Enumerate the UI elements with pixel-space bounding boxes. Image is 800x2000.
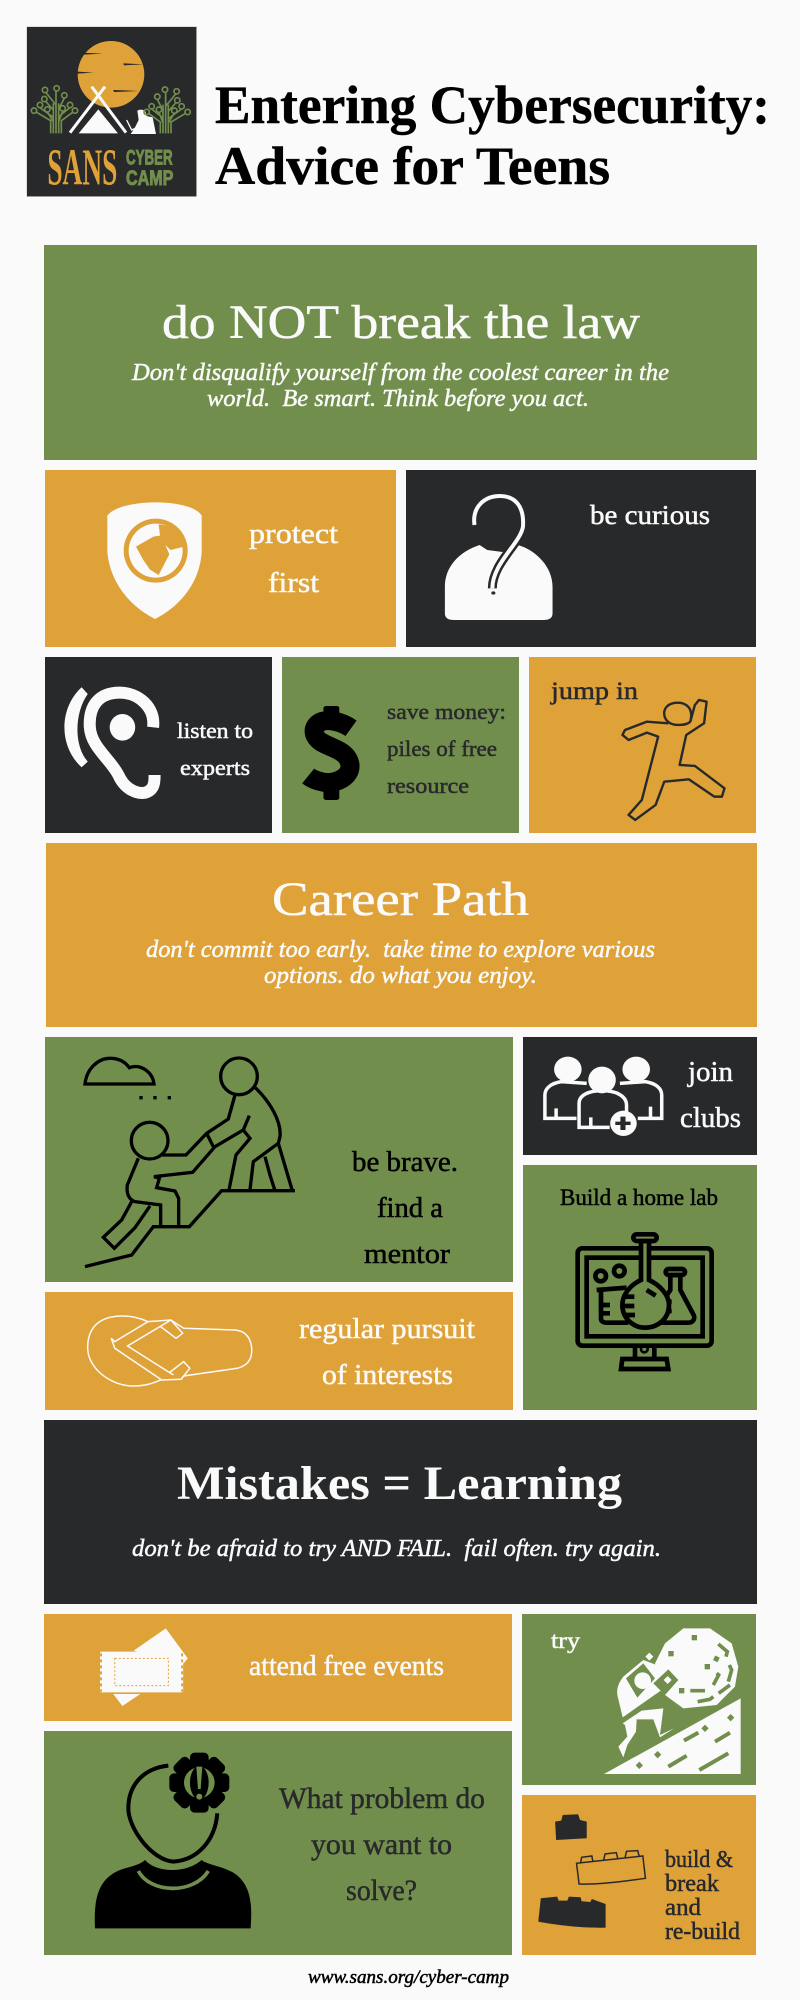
text: don't be afraid: don't be afraid to try AND FAIL. fail often. try again. bbox=[132, 1536, 661, 1562]
label: protect first bbox=[249, 518, 338, 599]
icon: ear bbox=[64, 687, 155, 793]
text: don't commit too early: don't commit too early. take time to explore various bbox=[146, 937, 655, 963]
label: join clubs bbox=[680, 1057, 741, 1134]
icon: circuit tree right bbox=[144, 87, 190, 133]
panel: protect first bbox=[45, 470, 396, 647]
icon: building bricks bbox=[538, 1814, 645, 1928]
label: listen to experts: experts bbox=[180, 755, 250, 780]
label: save money: resource bbox=[387, 773, 469, 798]
icon: dollar sign bbox=[308, 706, 351, 800]
label: protect first: protect bbox=[249, 518, 338, 550]
label: build a home lab: Build a home lab bbox=[560, 1185, 718, 1210]
icon: mentor helping climber bbox=[85, 1058, 295, 1267]
panel: try bbox=[522, 1614, 756, 1785]
label: try: try bbox=[551, 1628, 581, 1653]
icon: group of people bbox=[545, 1057, 662, 1136]
label: regular pursuit of interests bbox=[299, 1314, 475, 1391]
panel: be curious bbox=[406, 470, 756, 647]
label: build and re-build: break bbox=[665, 1871, 719, 1897]
panel: career path bbox=[46, 843, 757, 1027]
label: save money bbox=[387, 699, 506, 798]
heading: mistakes = learning: Mistakes = Learning bbox=[177, 1457, 622, 1510]
label: be brave, find a mentor: find a bbox=[377, 1193, 444, 1224]
logo: SANS Cyber Camp bbox=[27, 27, 197, 197]
text: don't commit too early bbox=[146, 937, 655, 989]
label: be brave, find a mentor: mentor bbox=[364, 1239, 451, 1270]
heading: do NOT break the law: do NOT break the law bbox=[162, 296, 640, 349]
panel: mistakes = learning bbox=[44, 1420, 757, 1604]
text: disqualify: Don't disqualify yourself from the coolest career in the bbox=[131, 360, 669, 386]
heading: career path: Career Path bbox=[272, 873, 529, 926]
text: disqualify bbox=[131, 360, 669, 412]
logo wordmark SANS: SANS bbox=[47, 139, 117, 196]
panel: build and re-build bbox=[522, 1795, 756, 1955]
label: what problem do you want to solve bbox=[279, 1782, 485, 1907]
panel: attend free events bbox=[44, 1614, 512, 1721]
title: Advice for Teens bbox=[215, 136, 610, 196]
icon: sun bbox=[77, 41, 144, 108]
icon: circuit tree left bbox=[31, 86, 78, 133]
label: be curious: be curious bbox=[590, 500, 710, 530]
icon: camper with laptop bbox=[127, 110, 156, 134]
label: be brave, find a mentor: be brave. bbox=[352, 1147, 458, 1178]
icon: pushing a boulder uphill bbox=[604, 1628, 741, 1774]
panel: listen to experts bbox=[45, 657, 272, 833]
icon: person with question mark bbox=[445, 496, 553, 620]
icon: head with gear bbox=[95, 1753, 251, 1928]
label: save money: piles of free bbox=[387, 736, 497, 761]
title bbox=[215, 75, 770, 196]
label: listen to experts: listen to bbox=[177, 718, 253, 743]
icon: jumping figure bbox=[622, 700, 724, 820]
icon: tickets bbox=[100, 1628, 188, 1706]
panel: find a mentor bbox=[45, 1037, 513, 1282]
text: disqualify: world. Be smart. Think before you act. bbox=[207, 386, 589, 412]
label: save money: save money: bbox=[387, 699, 506, 724]
label: build and re-build: re-build bbox=[665, 1919, 740, 1945]
title: Entering Cybersecurity: bbox=[215, 75, 770, 135]
label: build and re-build: build & bbox=[665, 1847, 733, 1873]
panel: join clubs bbox=[523, 1037, 757, 1155]
label: build and re-build bbox=[665, 1847, 740, 1945]
label: jump in: jump in bbox=[550, 678, 639, 705]
label: regular pursuit of interests: regular pursuit bbox=[299, 1314, 475, 1345]
panel: do NOT break the law bbox=[44, 245, 757, 460]
logo wordmark CYBER: CYBER bbox=[126, 145, 173, 169]
label: protect first: first bbox=[268, 567, 319, 599]
icon: monitor with flasks bbox=[578, 1234, 712, 1369]
label: attend free events: attend free events bbox=[249, 1651, 444, 1682]
icon: flip-flop bbox=[88, 1316, 252, 1386]
text: don't commit too early: options. do what you enjoy. bbox=[264, 963, 537, 989]
label: regular pursuit of interests: of interests bbox=[322, 1360, 453, 1391]
icon: tent bbox=[70, 87, 126, 133]
panel: jump in bbox=[529, 657, 756, 833]
icon: shield with globe bbox=[107, 502, 202, 619]
logo wordmark CAMP: CAMP bbox=[126, 166, 173, 190]
panel: what problem do you want to solve bbox=[44, 1731, 512, 1955]
panel: regular pursuit of interests bbox=[45, 1292, 513, 1410]
panel: build a home lab bbox=[523, 1165, 757, 1410]
label: build and re-build: and bbox=[665, 1895, 701, 1921]
label: listen to experts bbox=[177, 718, 253, 780]
label: what problem do you want to solve: What problem do bbox=[279, 1782, 485, 1815]
label: join clubs: clubs bbox=[680, 1103, 741, 1134]
footer url: www.sans.org/cyber-camp bbox=[308, 1967, 509, 1988]
label: join clubs: join bbox=[687, 1057, 733, 1088]
panel: save money bbox=[282, 657, 519, 833]
label: what problem do you want to solve: you want to bbox=[311, 1828, 452, 1861]
label: be brave, find a mentor bbox=[352, 1147, 458, 1270]
label: what problem do you want to solve: solve? bbox=[346, 1874, 417, 1907]
